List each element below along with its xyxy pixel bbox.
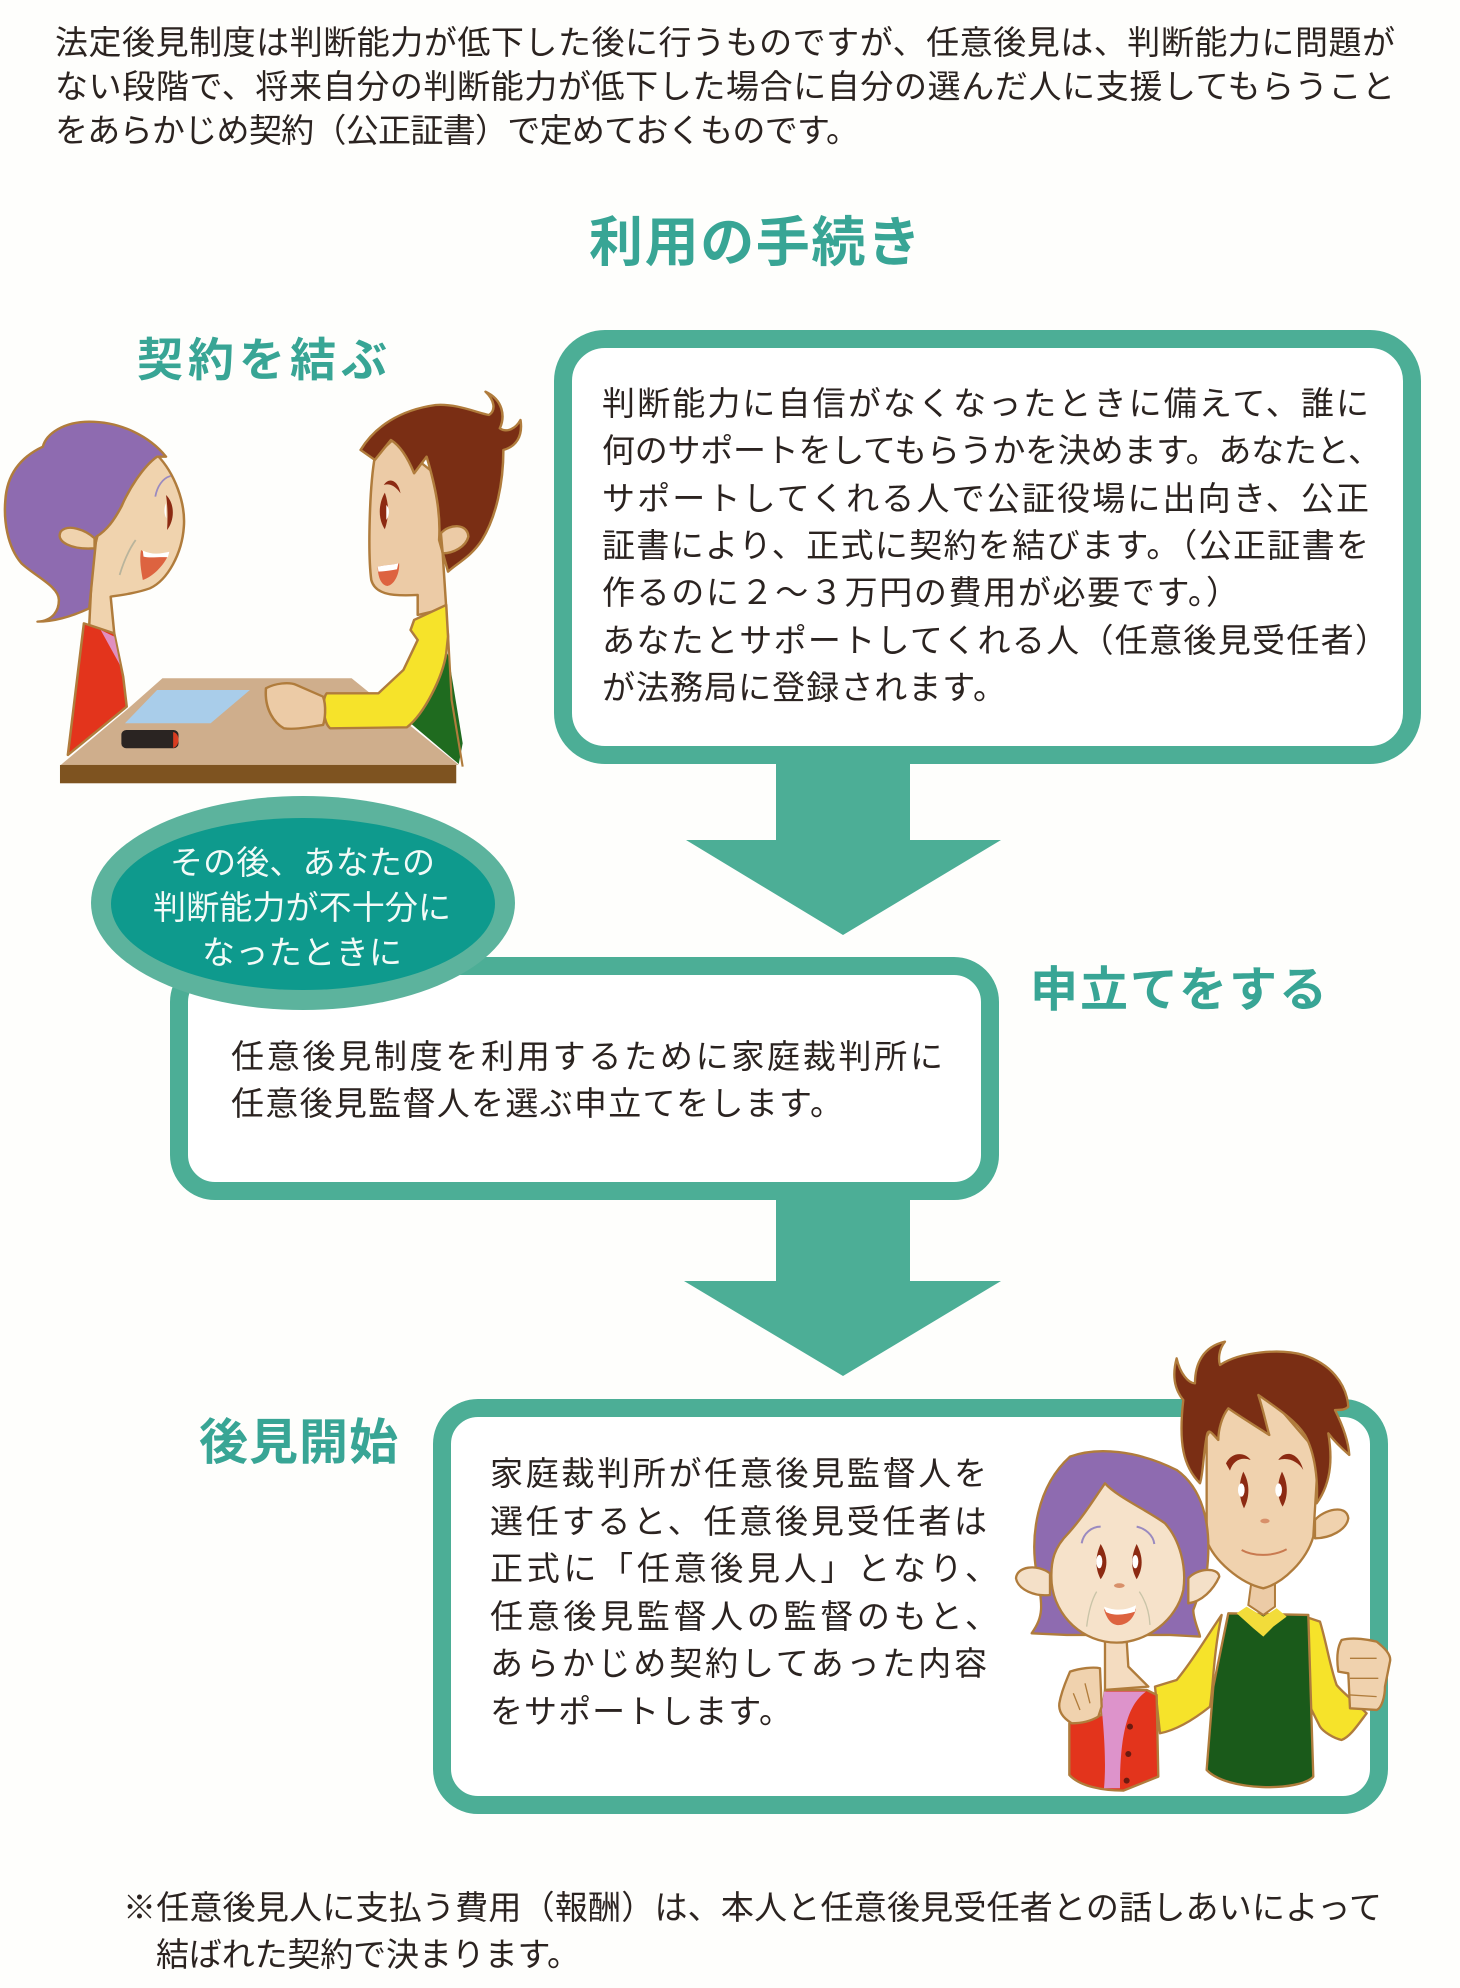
contract text: サポートしてくれる人で公証役場に出向き、公正 <box>602 480 1369 517</box>
title: 利用の手続き <box>589 213 921 273</box>
man ear <box>1315 1510 1348 1538</box>
woman features <box>1082 1527 1101 1543</box>
man neck <box>1248 1580 1275 1615</box>
woman ears <box>1016 1567 1050 1595</box>
petition text: 任意後見監督人を選ぶ申立てをします。 <box>231 1085 843 1122</box>
man features <box>1226 1454 1251 1471</box>
contract text: 何のサポートをしてもらうかを決めます。あなたと、 <box>602 432 1381 469</box>
start text: 正式に「任意後見人」となり、 <box>490 1550 998 1587</box>
petition text <box>231 1038 943 1122</box>
woman neck <box>1105 1640 1148 1690</box>
start text: 選任すると、任意後見受任者は <box>490 1503 987 1540</box>
intro text <box>55 24 1395 149</box>
man ear <box>441 526 468 553</box>
man fist <box>1337 1639 1390 1710</box>
woman face <box>1051 1483 1184 1643</box>
callout: afterwards: なったときに <box>202 934 402 971</box>
arrow: contract to petition <box>686 764 1001 935</box>
woman hand <box>1059 1668 1102 1723</box>
woman hair <box>5 422 166 622</box>
panel: start box <box>442 1408 1379 1805</box>
callout: afterwards <box>91 796 515 1010</box>
illustration: woman and man at table <box>5 392 521 783</box>
woman hair back <box>1032 1451 1208 1637</box>
man collar <box>1237 1607 1287 1637</box>
contract text: 作るのに２～３万円の費用が必要です。） <box>602 574 1239 611</box>
panel: petition box <box>179 966 990 1191</box>
start text: 家庭裁判所が任意後見監督人を <box>490 1455 987 1492</box>
stamp <box>121 730 179 748</box>
footnote: 結ばれた契約で決まります。 <box>156 1936 580 1973</box>
woman face and neck <box>89 455 184 633</box>
callout: afterwards: その後、あなたの <box>170 844 435 881</box>
panel: contract box <box>563 339 1412 755</box>
man fist <box>266 683 325 729</box>
contract text: 判断能力に自信がなくなったときに備えて、誰に <box>602 385 1369 422</box>
intro text: ない段階で、将来自分の判断能力が低下した場合に自分の選んだ人に支援してもらうこと <box>55 68 1395 105</box>
woman clothes <box>68 623 127 755</box>
man face and neck <box>369 440 446 615</box>
man face <box>1207 1393 1318 1588</box>
man body <box>1155 1615 1222 1733</box>
start text: をサポートします。 <box>490 1693 792 1730</box>
woman brow, eye, mouth <box>155 476 171 497</box>
woman ear <box>60 528 95 549</box>
intro text: をあらかじめ契約（公正証書）で定めておくものです。 <box>55 112 859 149</box>
man vest <box>411 653 463 764</box>
start text <box>490 1455 998 1730</box>
contract text: あなたとサポートしてくれる人（任意後見受任者） <box>602 622 1388 659</box>
start text: 任意後見監督人の監督のもと、 <box>490 1598 998 1635</box>
man hair <box>361 392 521 572</box>
start text: あらかじめ契約してあった内容 <box>490 1645 987 1682</box>
arrow: petition to start <box>684 1200 1001 1376</box>
contract text <box>602 385 1388 706</box>
contract text: が法務局に登録されます。 <box>602 669 1006 706</box>
man arm <box>324 605 448 728</box>
contract text: 証書により、正式に契約を結びます。（公正証書を <box>602 527 1369 564</box>
heading: contract: 契約を結ぶ <box>137 334 387 386</box>
table <box>61 678 459 765</box>
heading: petition: 申立てをする <box>1030 964 1327 1017</box>
man hair <box>1174 1342 1349 1503</box>
heading: guardianship start: 後見開始 <box>199 1416 398 1470</box>
intro text: 法定後見制度は判断能力が低下した後に行うものですが、任意後見は、判断能力に問題が <box>55 24 1395 61</box>
man brow, eye, mouth <box>384 480 401 493</box>
illustration: woman and man together <box>1016 1342 1390 1791</box>
woman body <box>1069 1690 1158 1791</box>
petition text: 任意後見制度を利用するために家庭裁判所に <box>231 1038 943 1075</box>
callout: afterwards: 判断能力が不十分に <box>153 889 451 926</box>
footnote: ※任意後見人に支払う費用（報酬）は、本人と任意後見受任者との話しあいによって <box>123 1889 1382 1926</box>
footnote <box>123 1889 1382 1973</box>
